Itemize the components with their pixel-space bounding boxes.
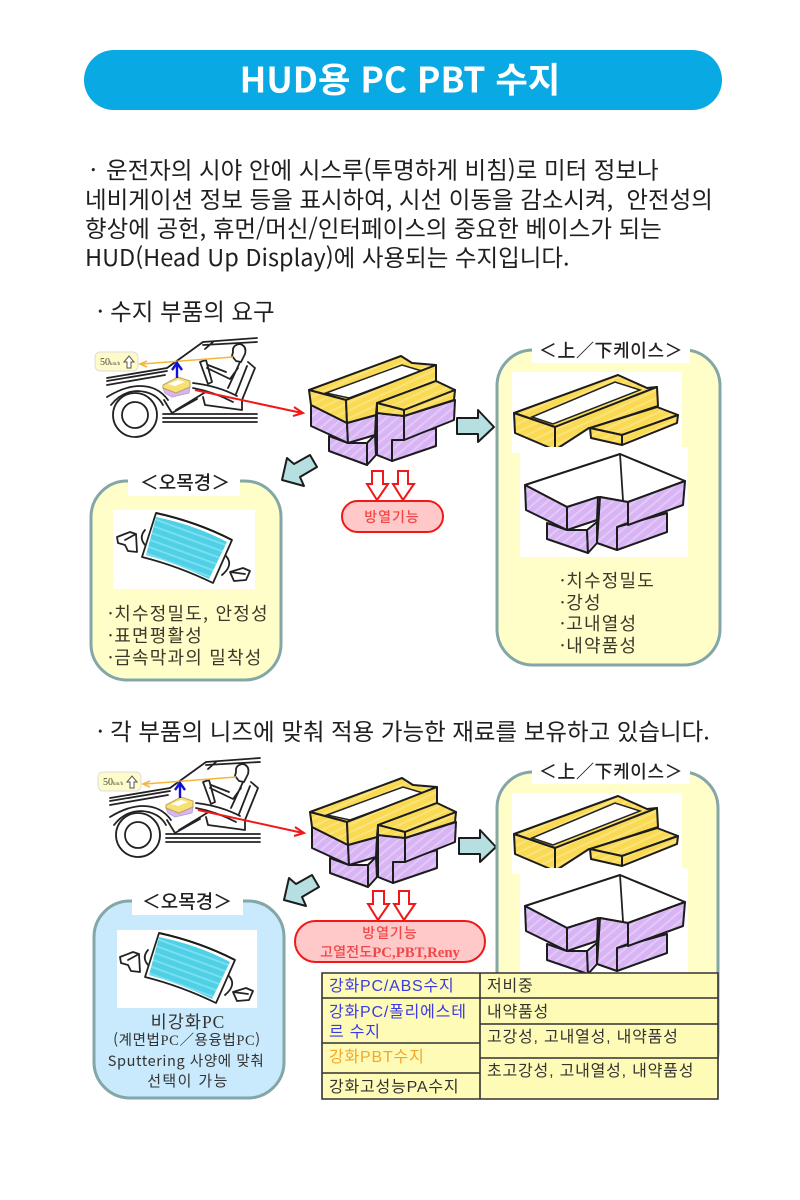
- requirements list: [108, 600, 269, 670]
- material description: 선택이 가능: [147, 1070, 229, 1091]
- panel heading: ＜오목경＞: [142, 887, 232, 914]
- intro text block: 향상에 공헌, 휴먼/머신/인터페이스의 중요한 베이스가 되는: [85, 210, 662, 244]
- table: properties: [487, 977, 694, 1080]
- lower case illustration: [520, 868, 688, 978]
- sightline arrow: [140, 357, 233, 367]
- section heading: resin part requirements: · 수지 부품의 요구: [97, 293, 275, 327]
- requirements list: [560, 567, 655, 658]
- requirements list: ·치수정밀도, 안정성: [108, 600, 269, 626]
- intro text block: 네비게이션 정보 등을 표시하여, 시선 이동을 감소시켜, 안전성의: [85, 181, 713, 215]
- table: properties: 저비중: [487, 977, 534, 995]
- upper case illustration: [512, 793, 682, 874]
- intro text block: ·: [90, 152, 97, 186]
- arrow to windshield panel, second: [284, 875, 319, 906]
- intro text block: HUD(Head Up Display)에 사용되는 수지입니다.: [85, 239, 570, 273]
- intro text block: 운전자의 시야 안에 시스루(투명하게 비침)로 미터 정보나: [106, 152, 659, 186]
- material table: [322, 973, 718, 1099]
- lower case illustration: [520, 447, 688, 557]
- requirements list: ·치수정밀도: [560, 567, 655, 593]
- heat dissipation pill with materials: 방열기능: [362, 923, 418, 943]
- table: material names: [329, 977, 467, 1096]
- requirements list: ·강성: [560, 589, 602, 615]
- speed label 50km/h: [98, 772, 141, 791]
- table: properties: 고강성, 고내열성, 내약품성: [487, 1028, 679, 1046]
- title: [84, 50, 722, 110]
- upper case illustration: [512, 372, 682, 453]
- diagram: car with HUD: [95, 338, 303, 437]
- heat dissipation pill with materials: 고열전도PC,PBT,Reny: [320, 942, 461, 962]
- panel heading: ＜오목경＞: [140, 468, 230, 495]
- main block: HUD housing, second: [310, 778, 456, 887]
- panel: upper and lower case: [497, 337, 720, 665]
- material description: Sputtering 사양에 맞춰: [108, 1050, 264, 1071]
- table: material names: 강화고성능PA수지: [329, 1078, 459, 1096]
- panel: windshield, blue: [94, 887, 284, 1098]
- table: material names: 강화PC/ABS수지: [329, 977, 455, 995]
- requirements list: ·금속막과의 밀착성: [108, 644, 263, 670]
- windshield illustration: [117, 930, 257, 1008]
- heat dissipation arrows, second: [368, 891, 415, 920]
- table: material names: 르 수지: [329, 1023, 381, 1041]
- panel: windshield: [91, 468, 281, 680]
- material description: 비강화PC: [151, 1009, 225, 1034]
- table: properties: 내약품성: [487, 1003, 549, 1021]
- heat dissipation pill with materials: [295, 921, 485, 962]
- heat dissipation pill: [342, 501, 443, 532]
- windshield illustration: [113, 510, 255, 589]
- heat dissipation arrows: [367, 471, 414, 500]
- requirements list: ·내약품성: [560, 632, 637, 658]
- main block: HUD housing: [309, 356, 455, 465]
- speed label 50km/h: 50km/h: [100, 357, 121, 368]
- panel heading: ＜上／下케이스＞: [539, 758, 683, 784]
- requirements list: ·고내열성: [560, 610, 637, 636]
- arrow to case panel, second: [459, 830, 496, 862]
- blue arrow: [175, 783, 185, 798]
- red arrow: [195, 390, 303, 416]
- arrow to windshield panel: [282, 455, 317, 486]
- sightline arrow: [143, 777, 236, 787]
- material description: [108, 1009, 264, 1091]
- material description: (계면법PC／용융법PC): [113, 1029, 261, 1050]
- red arrow: [198, 810, 304, 836]
- table: material names: 강화PBT수지: [329, 1048, 425, 1066]
- diagram: car with HUD, second: [98, 758, 304, 857]
- table: material names: 강화PC/폴리에스테: [329, 1003, 467, 1021]
- blue arrow: [172, 363, 182, 378]
- speed label 50km/h: 50km/h: [103, 777, 124, 788]
- title: HUD용 PC PBT 수지: [240, 52, 560, 104]
- arrow to case panel: [457, 410, 494, 442]
- panel: upper and lower case, second: [497, 758, 718, 1087]
- requirements list: ·표면평활성: [108, 622, 203, 648]
- section heading: materials: · 각 부품의 니즈에 맞춰 적용 가능한 재료를 보유하고 있습니다.: [97, 713, 710, 747]
- panel heading: ＜上／下케이스＞: [539, 337, 683, 363]
- heat dissipation pill: 방열기능: [364, 507, 420, 527]
- intro text block: [85, 152, 713, 273]
- table: properties: 초고강성, 고내열성, 내약품성: [487, 1062, 694, 1080]
- speed label 50km/h: [95, 352, 138, 371]
